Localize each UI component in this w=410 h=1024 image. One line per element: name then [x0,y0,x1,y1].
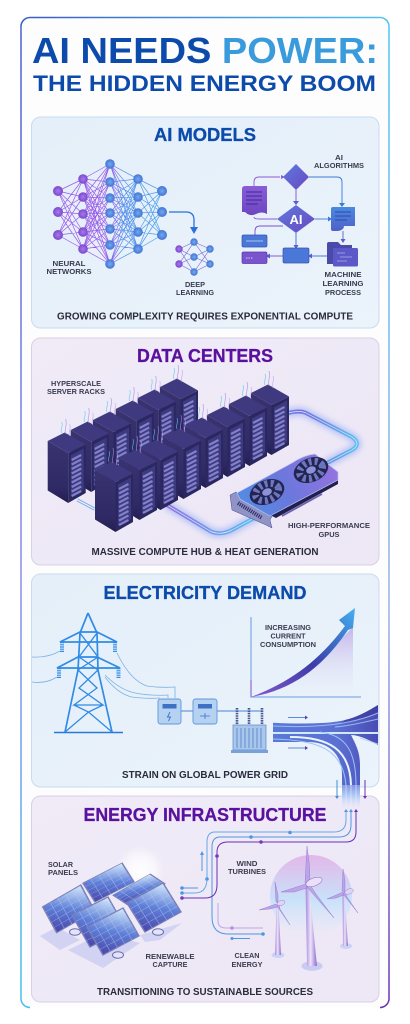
caption: AI models: GROWING COMPLEXITY REQUIRES EXPONENTIAL COMPUTE [57,312,353,322]
title: AI NEEDS POWER: [32,30,378,71]
panel: energy infrastructure [32,796,379,1002]
label: solar panels: PANELS [48,868,78,877]
label: neural networks: NEURAL [52,259,86,268]
icon: GPU card [230,452,338,528]
icon: solar panels [40,846,182,968]
label: server racks: SERVER RACKS [47,387,105,396]
label: renewable capture: RENEWABLE [146,952,194,961]
label: deep learning: LEARNING [176,288,214,297]
icon: electric meters [158,699,263,724]
label: machine learning process: LEARNING [322,279,364,288]
label: increasing consumption: INCREASING [265,623,311,632]
label: server racks: HYPERSCALE [51,379,101,388]
diagram: AI algorithm flowchart: AI [290,212,302,227]
icon: wind turbines [259,846,358,971]
label: wind turbines: WIND [236,859,258,868]
label: deep learning: DEEP [185,280,205,289]
arrow: network to deep learning [169,212,198,234]
panel: electricity demand [32,574,379,787]
caption: energy infrastructure: TRANSITIONING TO SUSTAINABLE SOURCES [97,987,313,998]
chart: neural network [53,159,167,269]
caption: data centers: MASSIVE COMPUTE HUB & HEAT GENERATION [92,547,318,558]
title: THE HIDDEN ENERGY BOOM [33,71,376,96]
power cable bundle [273,705,378,812]
label: renewable capture: CAPTURE [152,960,188,969]
chart: rising consumption [251,608,361,697]
power lines [32,651,175,698]
label: machine learning process: PROCESS [325,288,361,297]
panel: data centers [32,338,379,565]
label: neural networks: NETWORKS [46,267,92,276]
label: clean energy: ENERGY [232,960,262,969]
server racks [48,365,289,532]
heading: electricity demand: ELECTRICITY DEMAND [104,583,306,603]
label: increasing consumption: CURRENT [270,632,306,640]
label: machine learning process: MACHINE [324,270,362,279]
cooling pipe [77,412,357,533]
heading: data centers: DATA CENTERS [137,346,273,366]
diagram: AI algorithm flowchart [242,164,358,266]
label: solar panels [48,860,78,877]
heading: AI models: AI MODELS [154,125,256,145]
arrows: flow [288,716,308,750]
label: AI algorithms: ALGORITHMS [314,161,364,170]
label: GPUs: GPUS [318,530,340,539]
icon: transmission tower [54,613,123,732]
label: solar panels: SOLAR [48,860,74,869]
label: wind turbines: TURBINES [228,867,266,876]
energy lines [180,810,356,940]
icon: transformer [231,708,268,753]
title [32,30,378,96]
panel: AI models [32,117,379,328]
heading: energy infrastructure: ENERGY INFRASTRUCTURE [84,805,326,825]
label: AI algorithms: AI [335,153,343,162]
label: clean energy: CLEAN [234,951,260,960]
icon: deep learning network [175,238,214,276]
label: GPUs: HIGH-PERFORMANCE [288,521,370,530]
label: increasing consumption: CONSUMPTION [260,640,316,649]
caption: electricity demand: STRAIN ON GLOBAL POWER GRID [122,770,288,781]
